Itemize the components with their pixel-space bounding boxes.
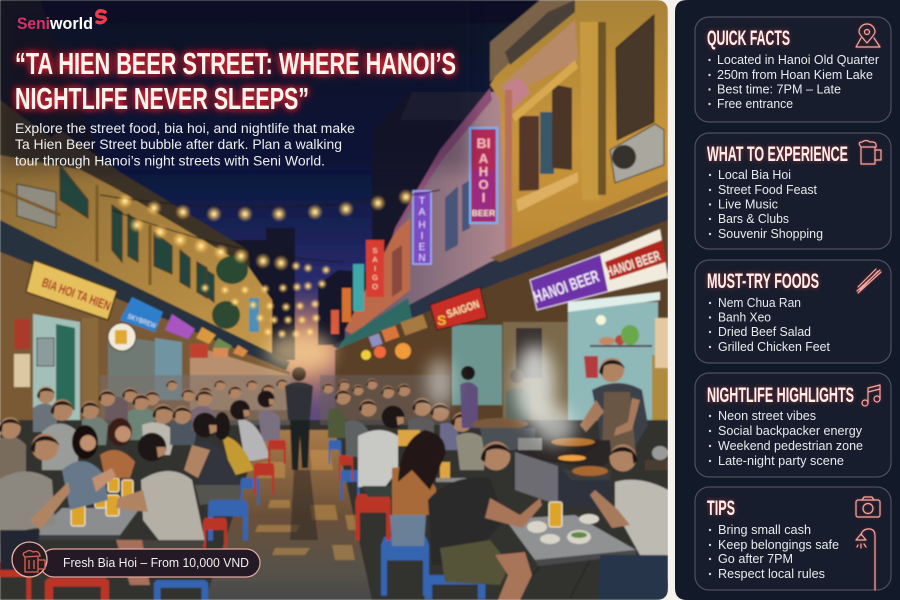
right awning — [332, 195, 668, 352]
panel: what to experience — [695, 133, 891, 249]
panel: quick facts: Located in Hanoi Old Quarter — [717, 52, 880, 67]
sign: Bia Hoi Ta Hien: BIA HOI TA HIEN — [40, 275, 113, 313]
icon: music notes — [862, 385, 880, 406]
neon sign: Saigon vertical: A — [372, 255, 378, 264]
stall metal front — [515, 452, 558, 505]
mid diners right — [328, 389, 486, 497]
panel: what to experience: Street Food Feast — [718, 182, 817, 197]
sign: Bia Hoi Ta Hien — [26, 260, 117, 320]
panel: nightlife highlights: Weekend pedestrian zone — [718, 438, 863, 453]
left awning — [0, 220, 290, 372]
shop shelf items — [584, 315, 652, 378]
far mid roof — [400, 92, 490, 120]
neon sign: Bia Hoi Beer: A — [479, 151, 489, 166]
stall plate — [472, 418, 528, 430]
street scene illustration — [0, 0, 669, 600]
neon sign: Bia Hoi Beer: I — [482, 190, 485, 205]
panel: must-try foods: Banh Xeo — [718, 310, 771, 324]
left table with beers — [34, 478, 140, 540]
left shutter door — [56, 324, 75, 410]
neon sign: Saigon vertical: S — [372, 246, 378, 255]
sign: Hanoi Beer white red: HANOI BEER — [604, 247, 662, 280]
man white tee — [358, 430, 398, 487]
price badge — [12, 542, 260, 577]
hazy background crowd — [100, 375, 450, 425]
right shopfront wall — [335, 220, 668, 440]
stools — [0, 440, 669, 600]
man black tee — [428, 477, 505, 565]
neon sign: Bia Hoi Beer: BEER — [472, 208, 495, 218]
woman blue-grey — [62, 461, 108, 510]
far shops glow — [190, 345, 290, 410]
neon teal sign — [353, 264, 364, 311]
neon sign: Ta Hien: A — [419, 207, 426, 218]
neon sign: Ta Hien: E — [419, 242, 426, 253]
panel: quick facts: QUICK FACTS — [707, 26, 790, 50]
panel: must-try foods: Dried Beef Salad — [718, 324, 811, 339]
row of backs along street left — [184, 390, 280, 505]
woman yellow — [222, 436, 254, 476]
far buildings — [232, 114, 462, 361]
stall lanterns — [361, 314, 428, 360]
neon orange sign — [342, 288, 351, 322]
left tree — [216, 256, 248, 284]
panel: what to experience: Live Music — [718, 196, 778, 212]
standing man — [285, 367, 313, 470]
left dark upper storey — [0, 1, 100, 158]
intro text: tour through Hanoi’s night streets with Seni World. — [15, 154, 325, 168]
intro text: Ta Hien Beer Street bubble after dark. Plan a walking — [15, 137, 342, 152]
logo — [17, 11, 105, 33]
pink underside — [500, 20, 578, 98]
bowl right — [652, 446, 668, 460]
intro text: Explore the street food, bia hoi, and nightlife that make — [15, 121, 355, 136]
panel: what to experience: Bars & Clubs — [718, 211, 789, 226]
grill — [515, 440, 612, 468]
cook apron — [506, 388, 530, 420]
second shop interior — [107, 338, 156, 398]
panel: must-try foods: Nem Chua Ran — [718, 295, 801, 310]
foreground diners left — [0, 418, 205, 585]
neon sign: Ta Hien: N — [418, 253, 426, 264]
foreground diners right — [390, 430, 668, 600]
left air conditioner — [17, 184, 56, 228]
icon: beer mug badge — [23, 550, 45, 572]
window shutters — [512, 60, 578, 212]
shadow of standing man — [290, 470, 318, 540]
panel: what to experience: Souvenir Shopping — [718, 226, 823, 241]
title: NIGHTLIFE NEVER SLEEPS” — [15, 82, 309, 116]
man beige — [456, 433, 486, 470]
wok cook — [599, 358, 625, 382]
logo: Seni — [17, 14, 50, 33]
far neon signs — [249, 298, 339, 334]
logo: world — [49, 14, 93, 33]
small orange signs — [190, 327, 248, 358]
panel: tips: Keep belongings safe — [718, 537, 839, 552]
smaller interior — [452, 325, 502, 405]
panel: must-try foods: Grilled Chicken Feet — [718, 339, 830, 354]
panel: what to experience: Local Bia Hoi — [718, 167, 791, 182]
title — [15, 47, 456, 116]
man dark tee — [195, 441, 240, 495]
pink facade — [345, 92, 512, 352]
smoke — [427, 345, 575, 445]
neon sign: Saigon vertical: O — [372, 282, 378, 291]
left shopfront wall — [0, 252, 290, 425]
panel: quick facts: Free entrance — [717, 96, 793, 111]
orange window — [392, 245, 402, 297]
left yellow pillar — [82, 318, 98, 408]
neon sign: Bia Hoi Beer: BI — [476, 135, 490, 151]
neon sign: Bia Hoi Beer: O — [478, 177, 489, 192]
right air conditioner — [610, 124, 664, 183]
man white grey tee — [615, 480, 668, 560]
man grey — [345, 420, 368, 458]
title: “TA HIEN BEER STREET: WHERE HANOI’S — [15, 47, 456, 81]
intro text — [15, 121, 355, 168]
blue sign: SKYBREW — [126, 313, 157, 330]
wet cobbled street — [205, 430, 372, 600]
side panel — [675, 0, 900, 600]
panel: must-try foods: MUST-TRY FOODS — [707, 269, 819, 293]
left yellow facade — [0, 155, 272, 365]
panel: must-try foods — [695, 260, 891, 363]
panel: quick facts: Best time: 7PM – Late — [717, 82, 841, 96]
man white-grey back — [238, 420, 268, 462]
night sky — [39, 0, 540, 421]
panel: tips: Respect local rules — [718, 566, 825, 581]
panel: tips: Bring small cash — [718, 522, 811, 537]
round beer sign — [108, 323, 136, 351]
sign: Hanoi Beer purple: HANOI BEER — [531, 267, 602, 307]
string lights — [100, 189, 440, 339]
sign: Hanoi Beer white red — [600, 229, 668, 292]
left building — [0, 0, 290, 425]
cook purple — [460, 382, 478, 428]
small table — [398, 430, 420, 446]
left wall side signs — [14, 319, 30, 349]
yellow wall right — [652, 355, 668, 450]
ground under diners — [0, 420, 668, 600]
man olive — [328, 408, 346, 438]
neon sign: Bia Hoi Beer: H — [479, 164, 488, 179]
purple sign — [165, 314, 195, 339]
neon sign: Saigon vertical: G — [372, 273, 378, 282]
sign: Saigon — [430, 287, 487, 330]
left roof — [40, 130, 250, 268]
pillars — [580, 22, 600, 200]
warm glow overlay — [266, 332, 334, 372]
neon sign: Ta Hien — [413, 191, 431, 264]
panel: quick facts — [695, 17, 891, 122]
distant glow — [286, 288, 338, 410]
woman hair and shirt — [392, 465, 436, 515]
yellow facade — [488, 0, 668, 249]
man grey tee left — [0, 471, 55, 545]
neon sign: Ta Hien: H — [418, 220, 426, 231]
title shade — [0, 0, 470, 170]
neon sign: Ta Hien: T — [419, 196, 425, 207]
neon sign: Bia Hoi Beer — [470, 128, 497, 223]
woman orange — [100, 450, 135, 478]
left windows — [60, 165, 214, 302]
top shutter — [616, 15, 654, 140]
pink roof strip — [392, 88, 492, 238]
neon sign: Saigon vertical — [366, 240, 384, 297]
small framed picture — [37, 338, 54, 366]
foreground table right — [505, 502, 636, 598]
wok — [547, 440, 600, 456]
seated far group — [408, 417, 434, 442]
right panel sign — [655, 318, 668, 368]
panel: nightlife highlights — [695, 373, 891, 477]
neon sign: Ta Hien: I — [421, 231, 423, 242]
panel: nightlife highlights: Social backpacker energy — [718, 423, 862, 438]
street reflections — [255, 450, 360, 560]
sign: Saigon: SAIGON — [445, 298, 481, 321]
panel: nightlife highlights: Late-night party scene — [718, 453, 844, 468]
balcony — [490, 0, 575, 82]
side plate — [562, 470, 612, 480]
cooks and stall — [460, 358, 668, 510]
man grey purple — [258, 410, 280, 442]
shop interior — [568, 302, 658, 422]
blue pink window — [445, 180, 470, 252]
panel: tips: Go after 7PM — [718, 551, 793, 566]
icon: chopsticks — [857, 269, 881, 293]
orange return — [345, 218, 410, 335]
neon sign: Saigon vertical: I — [374, 264, 376, 273]
sign: Saigon: S — [437, 312, 446, 328]
left pillars — [0, 185, 150, 285]
sign: Hanoi Beer purple — [530, 253, 610, 310]
icon: camera — [856, 497, 880, 517]
price badge: Fresh Bia Hoi – From 10,000 VND — [63, 555, 249, 570]
pot — [518, 438, 542, 450]
right building — [249, 0, 668, 450]
panel: tips — [695, 487, 891, 590]
man white tee back — [141, 471, 205, 548]
mid row diners left — [0, 386, 216, 480]
icon: street lamp — [856, 529, 875, 590]
icon: beer mug — [859, 140, 881, 164]
blue sign — [120, 297, 163, 332]
icon: map pin — [856, 24, 880, 47]
left door interior — [33, 314, 80, 425]
panel: nightlife highlights: Neon street vibes — [718, 408, 816, 423]
panel: quick facts: 250m from Hoan Kiem Lake — [717, 67, 873, 82]
panel: tips: TIPS — [707, 496, 735, 520]
